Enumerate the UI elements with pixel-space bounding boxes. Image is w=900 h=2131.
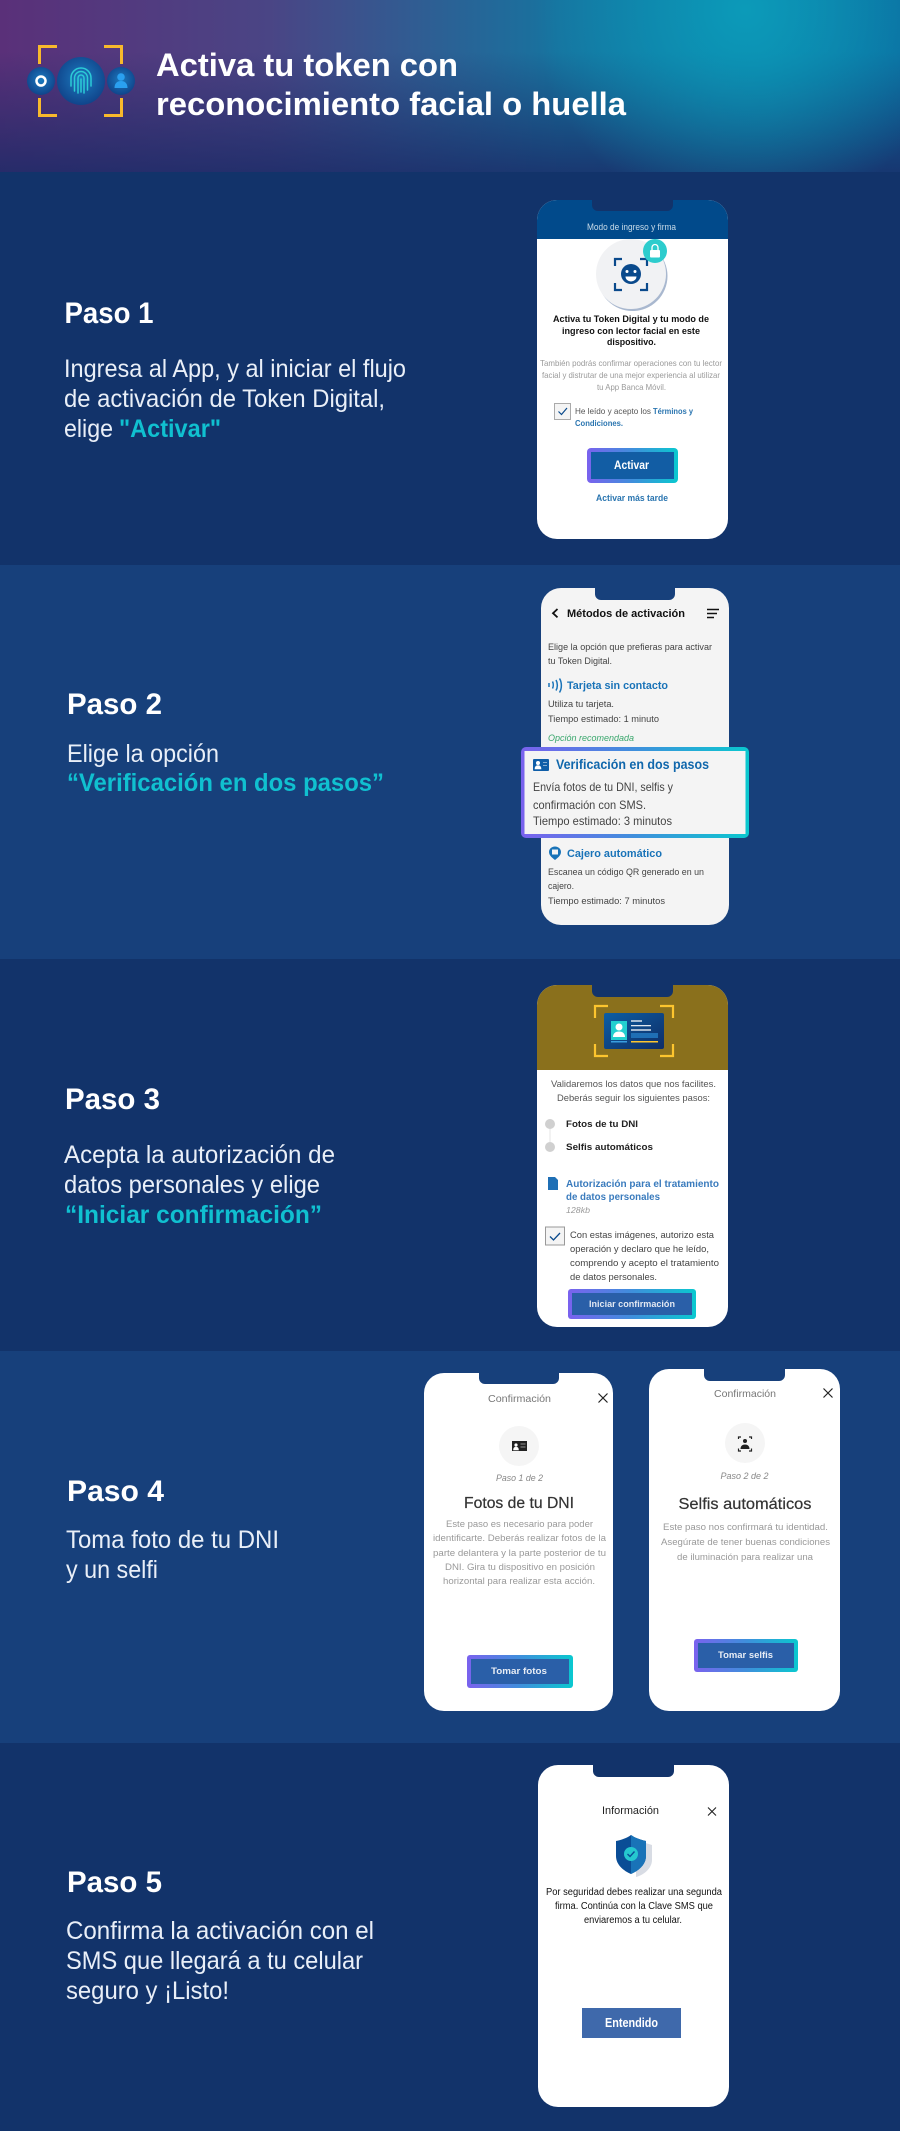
checkbox: autorizacion: de datos personales. [570,1272,657,1283]
list: pasos: Fotos de tu DNI [566,1119,638,1130]
phone: selfis automaticos: Confirmación [714,1388,776,1400]
phone: metodos de activacion [521,587,749,925]
checkbox: autorizacion: Con estas imágenes, autorizo esta [570,1230,715,1241]
title: Activa tu token con [156,47,458,83]
title [156,47,626,122]
text block: paso 5: Confirma la activación con el [66,1917,374,1945]
button: tomar fotos [467,1655,573,1688]
document link: Autorización para el tratamiento [566,1179,719,1190]
text: seguridad: Por seguridad debes realizar una segunda [546,1887,722,1898]
document link: de datos personales [566,1192,660,1203]
icon: face scan [596,239,668,311]
option: verificacion en dos pasos: Verificación en dos pasos [556,756,709,772]
text: instrucciones dni [433,1519,606,1586]
phone: activar token [537,199,728,539]
text: instrucciones dni: Este paso es necesario para poder [446,1519,593,1529]
option: cajero automatico: cajero. [548,881,574,891]
text: descripcion: tu App Banca Móvil. [597,382,666,392]
heading: paso 4: Paso 4 [67,1475,164,1508]
phone: fotos de tu dni [424,1372,613,1711]
text: activa tu token digital: dispositivo. [607,337,656,348]
text: descripcion: También podrás confirmar operaciones con tu lector [540,358,722,368]
checkbox: autorizacion: operación y declaro que he leído, [570,1244,709,1255]
icon: id card [499,1426,539,1466]
text: seguridad [546,1887,722,1926]
text: descripcion: facial y distrutar de una mejor experiencia al utilizar [542,370,720,380]
text: validaremos: Deberás seguir los siguientes pasos: [557,1093,710,1104]
option: tarjeta sin contacto: Tarjeta sin contacto [567,680,668,692]
heading: paso 2: Paso 2 [67,688,162,721]
panel: paso 2 [0,565,900,959]
option: verificacion en dos pasos: Tiempo estimado: 3 minutos [533,814,672,828]
text: validaremos [551,1079,716,1104]
icon: selfie [725,1423,765,1463]
text: activa tu token digital [553,314,709,348]
text: descripcion [540,358,722,392]
option: cajero automatico: Escanea un código QR generado en un [548,867,704,877]
phone: fotos de tu dni: Fotos de tu DNI [464,1495,574,1512]
button: activar [587,448,678,483]
document link: 128kb [566,1205,590,1215]
text block: paso 3 [64,1141,335,1229]
checkbox: autorizacion [546,1227,719,1283]
text block: paso 1 [64,355,406,443]
phone: activar token: Modo de ingreso y firma [587,222,677,233]
link: activar mas tarde: Activar más tarde [596,493,668,503]
text block: paso 3: “Iniciar confirmación” [65,1201,322,1229]
button: iniciar confirmacion [568,1289,696,1319]
button: tomar selfis [694,1639,798,1672]
phone: fotos de tu dni: Confirmación [488,1393,551,1405]
text block: paso 3: datos personales y elige [64,1171,320,1199]
phone: informacion: Información [602,1805,659,1817]
option: cajero automatico [548,846,704,906]
option: cajero automatico: Cajero automático [567,848,662,860]
button: iniciar confirmacion: Iniciar confirmación [589,1299,675,1309]
panel: paso 4 [0,1351,900,1743]
text: instrucciones selfi [661,1522,831,1562]
button: tomar fotos: Tomar fotos [491,1666,547,1677]
text block: paso 3: Acepta la autorización de [64,1141,335,1169]
text block: paso 2 [67,740,384,797]
text: instrucciones dni: parte delantera y la parte posterior de tu [433,1548,606,1558]
phone: metodos de activacion: Elige la opción que prefieras para activar [548,642,712,652]
panel: paso 1 [0,172,900,565]
text block: paso 4 [66,1526,279,1584]
phone: metodos de activacion: Métodos de activación [567,608,685,620]
text block: paso 5 [66,1917,374,2005]
phone: informacion [538,1764,729,2107]
phone: selfis automaticos: Paso 2 de 2 [720,1471,769,1482]
checkbox: terminos: Términos y [653,406,693,416]
text block: paso 2: “Verificación en dos pasos” [67,769,384,797]
text block: paso 5: seguro y ¡Listo! [66,1977,229,2005]
panel: paso 3 [0,959,900,1351]
text block: paso 4: y un selfi [66,1556,158,1584]
text block: paso 2: Elige la opción [67,740,219,768]
text block: paso 1: de activación de Token Digital, [64,385,385,413]
button: entendido: Entendido [605,2016,658,2030]
text: instrucciones selfi: Este paso nos confirmará tu identidad. [663,1522,828,1532]
document link [548,1177,719,1215]
checkbox: terminos: Condiciones. [575,418,623,428]
option: verificacion en dos pasos: confirmación con SMS. [533,798,646,812]
option: cajero automatico: Tiempo estimado: 7 minutos [548,896,666,906]
button: tomar selfis: Tomar selfis [718,1650,773,1661]
option: verificacion en dos pasos: Envía fotos de tu DNI, selfis y [533,780,673,794]
icon: biometric scan [27,46,135,116]
list: pasos [545,1119,653,1153]
button: entendido [582,2008,681,2038]
text: instrucciones dni: DNI. Gira tu dispositivo en posición [445,1562,595,1572]
option: tarjeta sin contacto [548,678,668,743]
option: tarjeta sin contacto: Tiempo estimado: 1 minuto [548,714,659,724]
phone: selfis automaticos: Selfis automáticos [678,1496,812,1513]
text block: paso 1: Ingresa al App, y al iniciar el flujo [64,355,406,383]
text: seguridad: firma. Continúa con la Clave SMS que [555,1901,713,1912]
icon: shield [616,1835,652,1877]
phone: selfis automaticos [649,1368,840,1711]
text: instrucciones selfi: de iluminación para realizar una [677,1552,813,1562]
text: instrucciones dni: horizontal para realizar esta acción. [443,1576,595,1586]
checkbox: autorizacion: comprendo y acepto el tratamiento [570,1258,719,1269]
heading: paso 1: Paso 1 [64,297,154,330]
text: activa tu token digital: Activa tu Token Digital y tu modo de [553,314,709,325]
list: pasos: Selfis automáticos [566,1142,653,1153]
panel: paso 5 [0,1743,900,2131]
text: validaremos: Validaremos los datos que nos facilites. [551,1079,716,1090]
text: activa tu token digital: ingreso con lector facial en este [562,326,700,337]
icon: id card scan [595,1006,673,1056]
text block: paso 1: elige [64,415,113,443]
title: reconocimiento facial o huella [156,86,626,122]
option: verificacion en dos pasos [521,747,749,838]
header banner [0,0,900,172]
heading: paso 3: Paso 3 [65,1083,160,1116]
heading: paso 5: Paso 5 [67,1866,162,1899]
checkbox: terminos: He leído y acepto los [575,406,651,416]
checkbox: terminos [554,404,693,428]
phone: metodos de activacion: tu Token Digital. [548,656,612,666]
text: seguridad: enviaremos a tu celular. [584,1915,682,1926]
phone: validacion de datos [537,984,728,1327]
text block: paso 4: Toma foto de tu DNI [66,1526,279,1554]
button: activar: Activar [614,458,649,472]
text: instrucciones dni: identificarte. Deberás realizar fotos de la [433,1533,606,1543]
text block: paso 5: SMS que llegará a tu celular [66,1947,363,1975]
option: tarjeta sin contacto: Utiliza tu tarjeta. [548,699,614,709]
option: tarjeta sin contacto: Opción recomendada [548,733,634,743]
phone: fotos de tu dni: Paso 1 de 2 [496,1473,544,1484]
text: instrucciones selfi: Asegúrate de tener buenas condiciones [661,1537,831,1547]
text block: paso 1: "Activar" [119,415,221,443]
